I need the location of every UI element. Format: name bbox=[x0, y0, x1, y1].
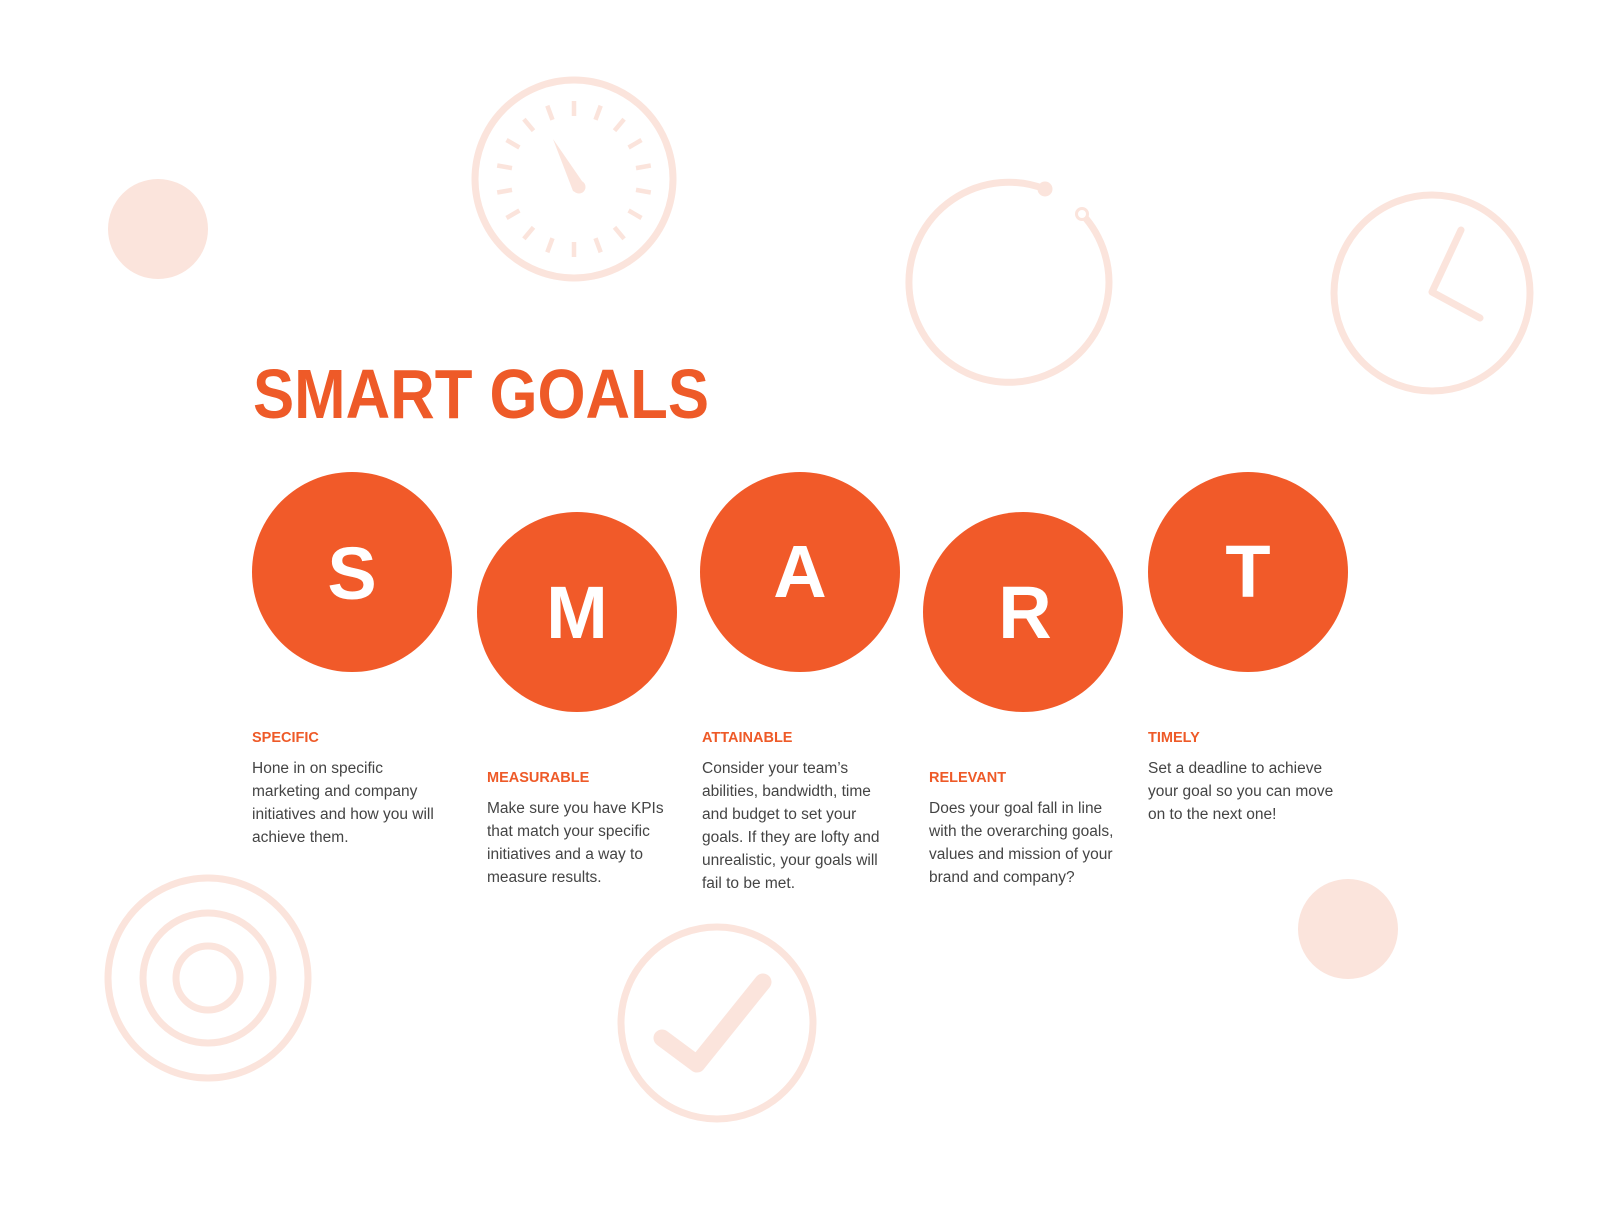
circle T bbox=[1148, 472, 1348, 672]
block: relevant: Does your goal fall in line bbox=[929, 800, 1102, 817]
block: timely bbox=[1148, 730, 1333, 823]
block: specific: achieve them. bbox=[252, 829, 348, 846]
block: measurable: MEASURABLE bbox=[487, 770, 590, 786]
icon: target bbox=[108, 878, 308, 1078]
block: timely: Set a deadline to achieve bbox=[1148, 760, 1322, 777]
block: attainable: fail to be met. bbox=[702, 875, 795, 892]
block: relevant bbox=[928, 770, 1113, 886]
circle R: R bbox=[998, 571, 1052, 654]
block: relevant: brand and company? bbox=[929, 869, 1075, 886]
block: specific: marketing and company bbox=[252, 783, 418, 800]
title: SMART GOALS bbox=[253, 355, 709, 433]
block: specific bbox=[252, 730, 434, 846]
block: measurable: initiatives and a way to bbox=[487, 846, 643, 863]
block: timely: on to the next one! bbox=[1148, 806, 1276, 823]
circle M: M bbox=[546, 571, 608, 654]
block: attainable: abilities, bandwidth, time bbox=[702, 783, 871, 800]
block: timely: your goal so you can move bbox=[1148, 783, 1333, 800]
block: specific: initiatives and how you will bbox=[252, 806, 434, 823]
block: measurable: that match your specific bbox=[487, 823, 650, 840]
circle A bbox=[700, 472, 900, 672]
block: attainable: unrealistic, your goals will bbox=[702, 852, 878, 869]
block: relevant: with the overarching goals, bbox=[928, 823, 1113, 840]
block: attainable: Consider your team’s bbox=[702, 760, 848, 777]
block: measurable: Make sure you have KPIs bbox=[487, 800, 664, 817]
block: attainable: and budget to set your bbox=[702, 806, 856, 823]
block: measurable bbox=[487, 770, 664, 886]
decoration: filled circle left bbox=[108, 179, 208, 279]
block: relevant: RELEVANT bbox=[929, 770, 1006, 786]
block: relevant: values and mission of your bbox=[929, 846, 1113, 863]
block: specific: SPECIFIC bbox=[252, 730, 319, 746]
circle R bbox=[923, 512, 1123, 712]
block: timely: TIMELY bbox=[1148, 730, 1200, 746]
icon: clock bbox=[1334, 195, 1530, 391]
circle T: T bbox=[1225, 530, 1271, 613]
block: attainable: goals. If they are lofty and bbox=[702, 829, 880, 846]
circle A: A bbox=[773, 530, 827, 613]
block: specific: Hone in on specific bbox=[252, 760, 383, 777]
block: attainable bbox=[702, 730, 880, 892]
decoration: filled circle right bbox=[1298, 879, 1398, 979]
block: measurable: measure results. bbox=[487, 869, 602, 886]
icon: checkmark bbox=[621, 927, 813, 1119]
circle S bbox=[252, 472, 452, 672]
circle M bbox=[477, 512, 677, 712]
block: attainable: ATTAINABLE bbox=[702, 730, 793, 746]
circle S: S bbox=[327, 532, 377, 615]
icon: refresh loop bbox=[909, 182, 1109, 382]
icon: gauge bbox=[475, 80, 673, 278]
